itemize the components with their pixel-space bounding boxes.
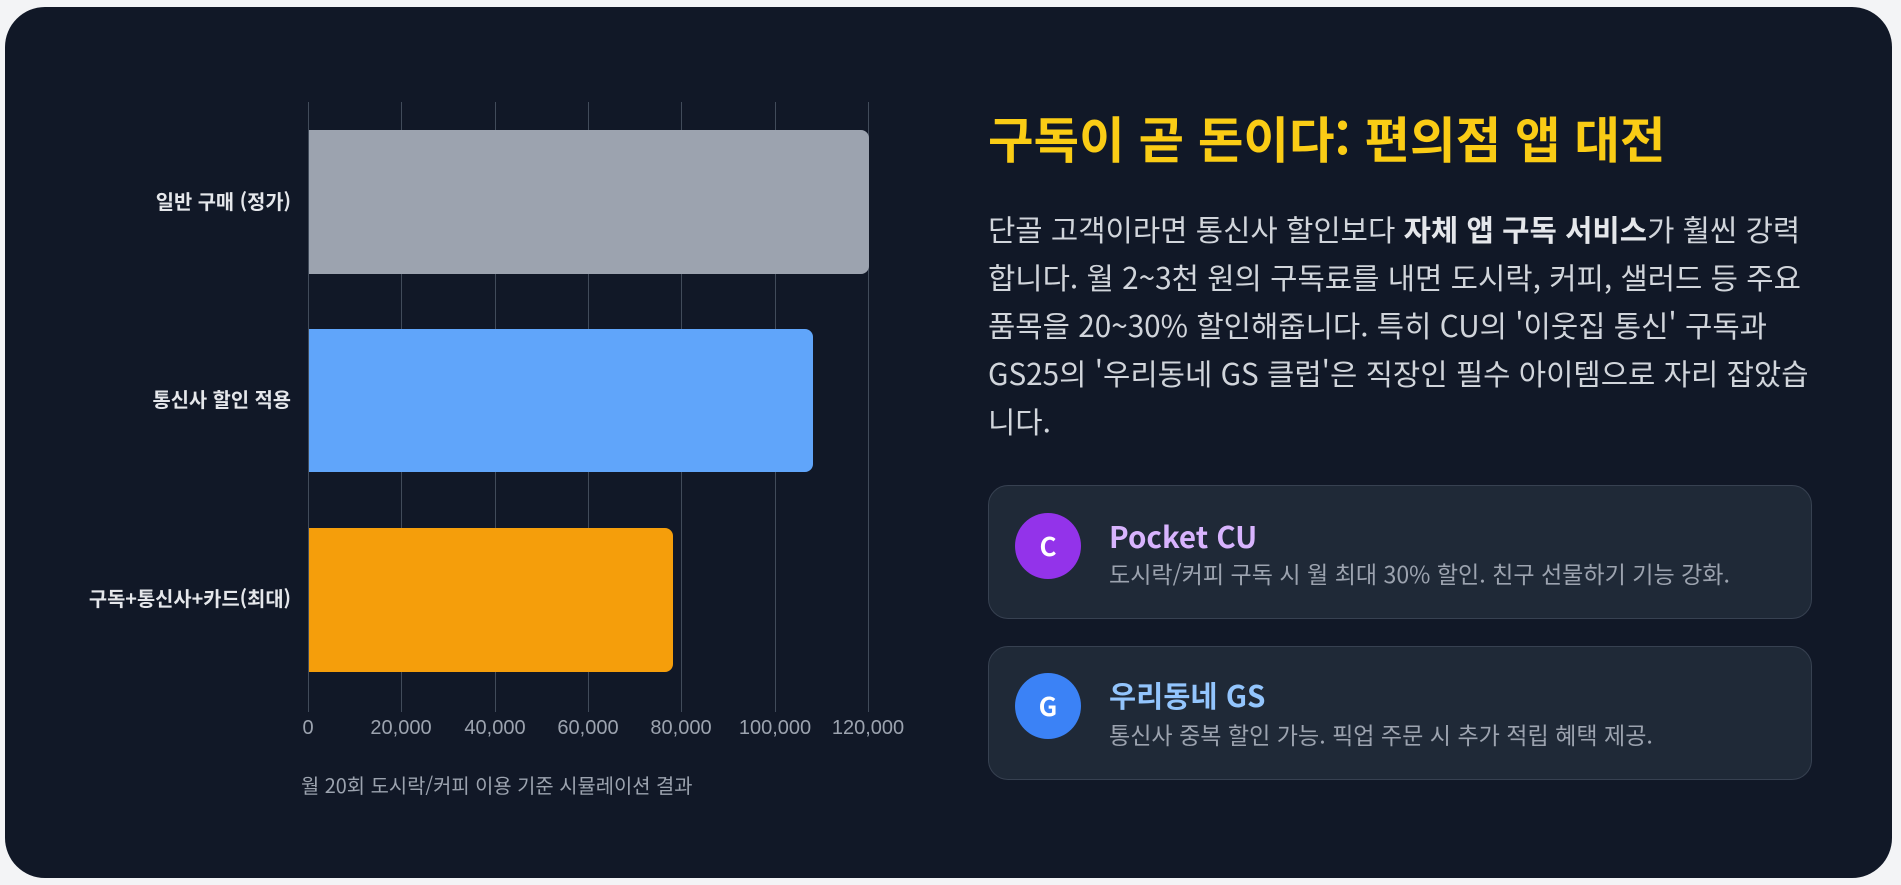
bar: max discount: [309, 528, 673, 672]
icon: G: [1015, 673, 1081, 739]
card description: 도시락/커피 구독 시 월 최대 30% 할인. 친구 선물하기 기능 강화.: [1109, 556, 1730, 590]
axis tick labels: 100,000: [739, 717, 811, 739]
paragraph: 합니다. 월 2~3천 원의 구독료를 내면 도시락, 커피, 샐러드 등 주요: [988, 255, 1801, 298]
title: 구독이 곧 돈이다: 편의점 앱 대전: [988, 102, 1665, 173]
axis tick labels: 0: [302, 717, 314, 739]
category label: telecom: 통신사 할인 적용: [153, 384, 291, 413]
paragraph: 단골 고객이라면 통신사 할인보다 자체 앱 구독 서비스가 훨씬 강력: [988, 207, 1800, 250]
category label: regular: 일반 구매 (정가): [156, 186, 291, 215]
icon: C: [1015, 513, 1081, 579]
bar chart: [89, 102, 904, 739]
paragraph: GS25의 '우리동네 GS 클럽'은 직장인 필수 아이템으로 자리 잡았습: [988, 351, 1809, 394]
axis tick labels: 20,000: [370, 717, 432, 739]
category label: combined: 구독+통신사+카드(최대): [89, 583, 291, 612]
card description: 통신사 중복 할인 가능. 픽업 주문 시 추가 적립 혜택 제공.: [1109, 717, 1653, 751]
paragraph: [988, 207, 1809, 442]
bar: telecom discount: [309, 329, 813, 472]
card title: Pocket CU: [1109, 515, 1257, 557]
icon: G: G: [1039, 687, 1057, 724]
icon: C: C: [1039, 527, 1057, 564]
bar: regular price: [309, 130, 869, 274]
axis tick labels: [302, 717, 904, 739]
axis tick labels: 60,000: [557, 717, 619, 739]
card: Woori GS: [988, 646, 1812, 780]
card title: 우리동네 GS: [1109, 674, 1265, 716]
axis tick labels: 40,000: [464, 717, 526, 739]
axis tick labels: 120,000: [832, 717, 904, 739]
paragraph: 니다.: [988, 399, 1051, 442]
card: Pocket CU: [988, 485, 1812, 619]
axis tick labels: 80,000: [650, 717, 712, 739]
paragraph: 품목을 20~30% 할인해줍니다. 특히 CU의 '이웃집 통신' 구독과: [988, 303, 1767, 346]
chart footnote: 월 20회 도시락/커피 이용 기준 시뮬레이션 결과: [301, 770, 692, 799]
